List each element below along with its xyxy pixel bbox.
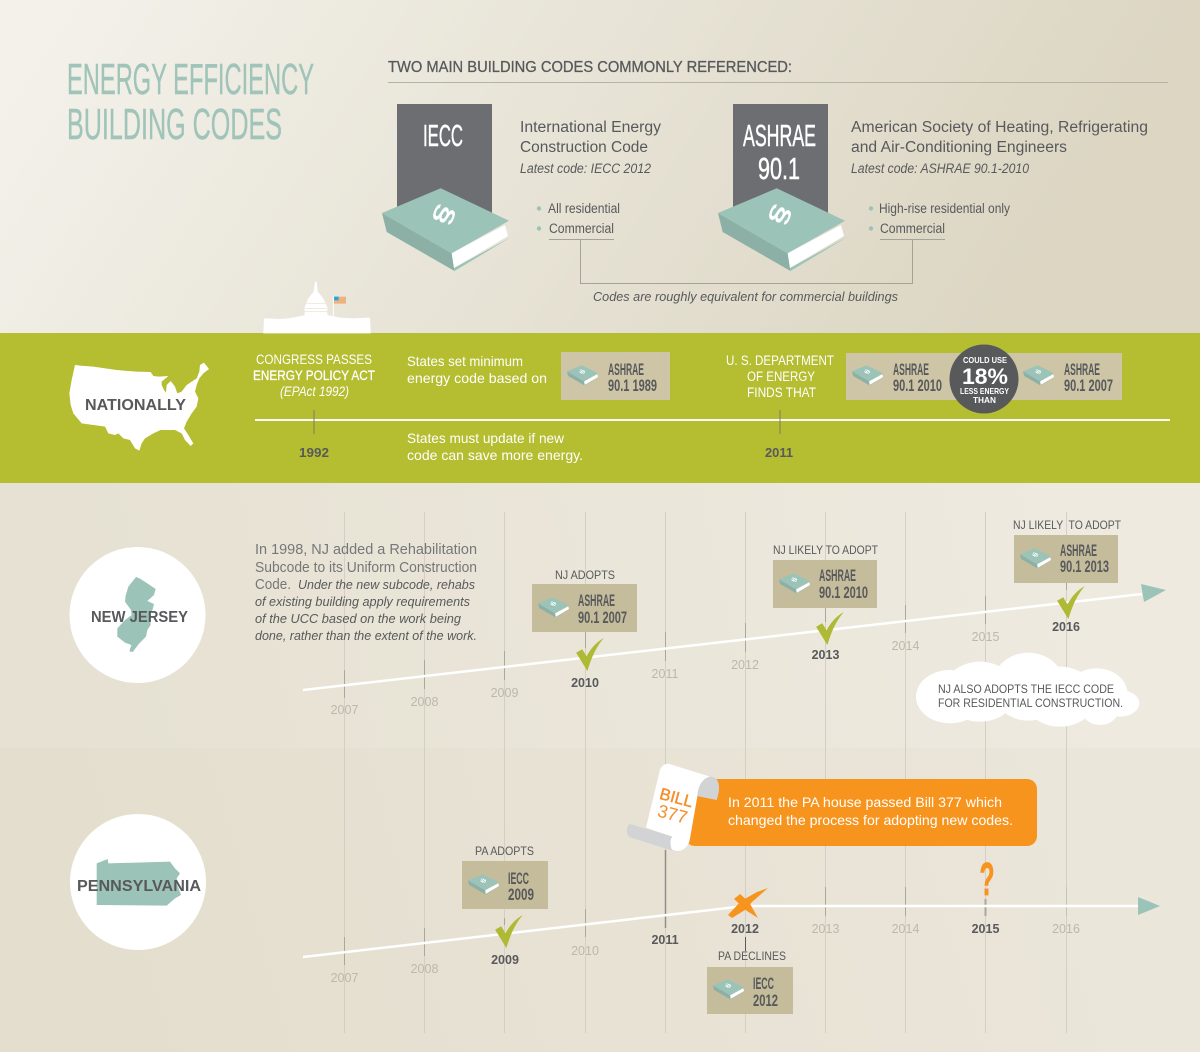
event: 1992 congress: CONGRESS PASSES [256,352,372,367]
event: PA adopts IECC 2009: IECC [508,870,529,888]
list: IECC applies to: Commercial [549,221,614,236]
text: NJ rehabilitation subcode: Code. [255,577,291,593]
background: New Jersey section [0,483,1200,748]
timeline: New Jersey: 2010 [571,676,599,690]
timeline verticals [344,512,1066,1033]
panel: IECC [382,104,661,271]
text: ASHRAE description [851,119,1148,176]
icon: ASHRAE tab and book: ASHRAE [743,118,816,153]
comparison: ASHRAE 2010 vs 2007: 90.1 2010 [893,377,942,395]
timeline: New Jersey: 2014 [892,639,919,653]
callout: Bill 377: changed the process for adopting new codes. [728,812,1013,828]
callout: NJ also adopts IECC: NJ ALSO ADOPTS THE IECC CODE [938,682,1114,696]
timeline: Pennsylvania: 2007 [331,971,358,985]
text: NJ rehabilitation subcode: Subcode to its Uniform Construction [255,560,477,576]
text: IECC description [520,119,661,176]
event: PA declines IECC 2012: IECC [753,975,774,993]
timeline: Pennsylvania [303,850,1160,985]
badge: New Jersey state: NEW JERSEY [91,609,188,626]
panel: New Jersey [70,518,1166,727]
panel: Pennsylvania [70,764,1160,1014]
timeline: Pennsylvania: 2009 [491,953,519,967]
icon: US map [69,363,209,451]
event: NJ likely to adopt 2013: NJ LIKELY TO ADOPT [1013,518,1122,532]
timeline: New Jersey: 2015 [972,630,999,644]
label: nationally: NATIONALLY [85,397,186,414]
event: 1992 congress [253,352,375,460]
list: ASHRAE applies to [869,201,1010,236]
event: PA adopts IECC 2009: 2009 [508,886,534,904]
event: 1992 congress: ENERGY POLICY ACT [253,368,375,383]
icon: capitol building [263,282,371,333]
badge: New Jersey state [70,547,206,683]
text: states must update: code can save more energy. [407,447,583,463]
callout: NJ also adopts IECC [916,653,1139,727]
timeline: Pennsylvania: 2016 [1052,922,1080,936]
callout: 18% less energy: THAN [973,395,996,405]
event: NJ adopts 2007: NJ ADOPTS [555,568,615,582]
connector: commercial equivalence bracket [549,240,945,284]
event: PA declines IECC 2012: PA DECLINES [718,949,786,963]
text: ASHRAE description: and Air-Conditioning Engineers [851,139,1067,156]
text: NJ rehabilitation subcode: of existing building apply requirements [255,595,470,609]
event: PA declines IECC 2012 [707,949,793,1014]
heading: two main codes: TWO MAIN BUILDING CODES COMMONLY REFERENCED: [388,59,792,76]
badge: ASHRAE 90.1 1989: 90.1 1989 [608,377,657,395]
badge: Pennsylvania state [70,814,206,950]
icon: bill scroll [627,764,719,852]
event: NJ likely to adopt 2013 [1013,518,1122,619]
text: IECC description: International Energy [520,119,661,136]
timeline: Pennsylvania: 2011 [651,933,679,947]
text: states must update [407,430,583,463]
event: 2011 department of energy: U. S. DEPARTMENT [726,353,834,368]
timeline: New Jersey: 2012 [731,658,759,672]
text: IECC description: Latest code: IECC 2012 [520,161,651,176]
text: states set minimum: States set minimum [407,353,523,369]
icon: bill scroll: BILL [658,785,695,811]
list: ASHRAE applies to: High-rise residential only [879,201,1010,216]
timeline: New Jersey: 2011 [652,667,678,681]
text: ASHRAE description: American Society of Heating, Refrigerating [851,119,1148,136]
icon: orange X [728,888,768,918]
timeline line [255,419,1170,421]
event: NJ likely to adopt 2010 [773,543,879,645]
panel: nationally [69,344,1170,463]
background: Pennsylvania section [0,748,1200,1052]
icon: ASHRAE tab and book: 90.1 [758,151,800,186]
text: NJ rehabilitation subcode [255,542,477,643]
event: NJ likely to adopt 2010: ASHRAE [819,567,856,585]
icon: ASHRAE tab and book [718,104,848,271]
text: NJ rehabilitation subcode: Under the new subcode, rehabs [298,578,475,592]
event: 2011 department of energy [726,353,834,460]
callout: 18% less energy: COULD USE [963,355,1007,365]
text: NJ rehabilitation subcode: In 1998, NJ added a Rehabilitation [255,542,477,558]
timeline: Pennsylvania: 2013 [812,922,839,936]
event: NJ likely to adopt 2010: NJ LIKELY TO ADOPT [773,543,879,557]
timeline: New Jersey: 2007 [331,703,358,717]
icon: bill scroll: 377 [655,801,690,828]
title: BUILDING CODES [67,100,282,149]
title [67,55,314,149]
panel: ASHRAE [718,104,1148,271]
timeline: New Jersey: 2008 [411,695,438,709]
callout: 18% less energy [950,344,1018,414]
comparison: ASHRAE 2010 vs 2007: ASHRAE [1064,361,1100,379]
text: ASHRAE description: Latest code: ASHRAE 90.1-2010 [851,161,1029,176]
badge: Pennsylvania state: PENNSYLVANIA [77,878,201,895]
callout: Bill 377 [627,764,1037,852]
event: 2011 department of energy: FINDS THAT [747,385,816,400]
timeline: New Jersey: 2009 [491,686,518,700]
comparison: ASHRAE 2010 vs 2007 [846,344,1122,414]
timeline: New Jersey: 2013 [812,648,839,662]
callout: 18% less energy: LESS ENERGY [960,386,1009,396]
timeline: Pennsylvania: 2015 [972,922,999,936]
event: NJ adopts 2007: 90.1 2007 [578,609,627,627]
comparison: ASHRAE 2010 vs 2007: ASHRAE [893,361,929,379]
icon: orange question mark: ? [980,853,994,905]
text: states must update: States must update if new [407,430,565,446]
icon: IECC tab and book [382,104,512,271]
timeline: New Jersey: 2016 [1052,620,1080,634]
callout: NJ also adopts IECC: FOR RESIDENTIAL CONSTRUCTION. [938,696,1123,710]
caption: codes equivalent: Codes are roughly equivalent for commercial buildings [593,289,898,304]
background: top section [0,0,1200,334]
list: IECC applies to: All residential [548,201,620,216]
text: states set minimum: energy code based on [407,370,547,386]
text: NJ rehabilitation subcode: of the UCC based on the work being [255,612,461,626]
text: NJ rehabilitation subcode: done, rather than the extent of the work. [255,629,477,643]
callout: 18% less energy: 18% [962,364,1008,389]
list: IECC applies to [537,201,620,236]
background: nationally band [0,333,1200,483]
event: 2011 department of energy: 2011 [765,446,793,460]
timeline: Pennsylvania: 2014 [892,922,919,936]
timeline: Pennsylvania: 2010 [571,944,599,958]
icon: IECC tab and book: IECC [423,118,463,153]
timeline: Pennsylvania: 2008 [411,962,438,976]
event: 1992 congress: (EPAct 1992) [280,384,349,399]
title: ENERGY EFFICIENCY [67,55,314,104]
event: PA declines IECC 2012: 2012 [753,992,778,1010]
text: states set minimum [407,353,547,386]
badge: ASHRAE 90.1 1989 [561,352,670,400]
event: PA adopts IECC 2009: PA ADOPTS [475,844,534,858]
timeline: Pennsylvania: 2012 [731,922,759,936]
badge: ASHRAE 90.1 1989: ASHRAE [608,361,644,379]
event: NJ likely to adopt 2010: 90.1 2010 [819,584,868,602]
event: 2011 department of energy: OF ENERGY [747,369,815,384]
event: NJ adopts 2007: ASHRAE [578,592,615,610]
event: 1992 congress: 1992 [299,446,329,460]
text: IECC description: Construction Code [520,139,648,156]
comparison: ASHRAE 2010 vs 2007: 90.1 2007 [1064,377,1113,395]
event: NJ adopts 2007 [532,568,637,671]
event: NJ likely to adopt 2013: ASHRAE [1060,542,1097,560]
list: ASHRAE applies to: Commercial [880,221,945,236]
timeline: New Jersey [303,583,1166,717]
event: PA adopts IECC 2009 [462,844,548,948]
callout: Bill 377: In 2011 the PA house passed Bill 377 which [728,794,1002,810]
event: NJ likely to adopt 2013: 90.1 2013 [1060,558,1109,576]
